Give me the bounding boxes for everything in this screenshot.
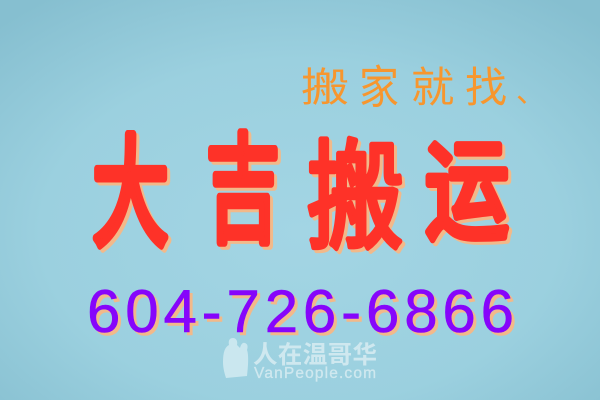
main title shadow: 运 <box>428 134 512 257</box>
tagline: 搬 <box>301 66 349 110</box>
main title: 搬 <box>307 131 404 264</box>
watermark chinese name: 人在温哥华 <box>253 341 377 369</box>
phone number: 604-726-6866 <box>87 278 514 345</box>
tagline: 就 <box>411 65 454 112</box>
main title shadow <box>95 128 512 267</box>
watermark logo <box>223 338 377 382</box>
tagline: 家 <box>359 63 399 114</box>
main title shadow: 吉 <box>209 128 283 260</box>
main title: 运 <box>425 131 509 254</box>
tagline <box>301 63 546 114</box>
watermark url: VanPeople.com <box>254 365 376 382</box>
main title: 大 <box>92 127 169 262</box>
tagline: 找 <box>465 64 507 111</box>
phone number shadow: 604-726-6866 <box>90 281 517 348</box>
main title shadow: 搬 <box>310 134 407 267</box>
icon: two people silhouette <box>223 338 248 378</box>
main title <box>92 125 509 264</box>
tagline: 、 <box>516 76 546 109</box>
main title shadow: 大 <box>95 130 172 265</box>
main title: 吉 <box>206 125 280 257</box>
